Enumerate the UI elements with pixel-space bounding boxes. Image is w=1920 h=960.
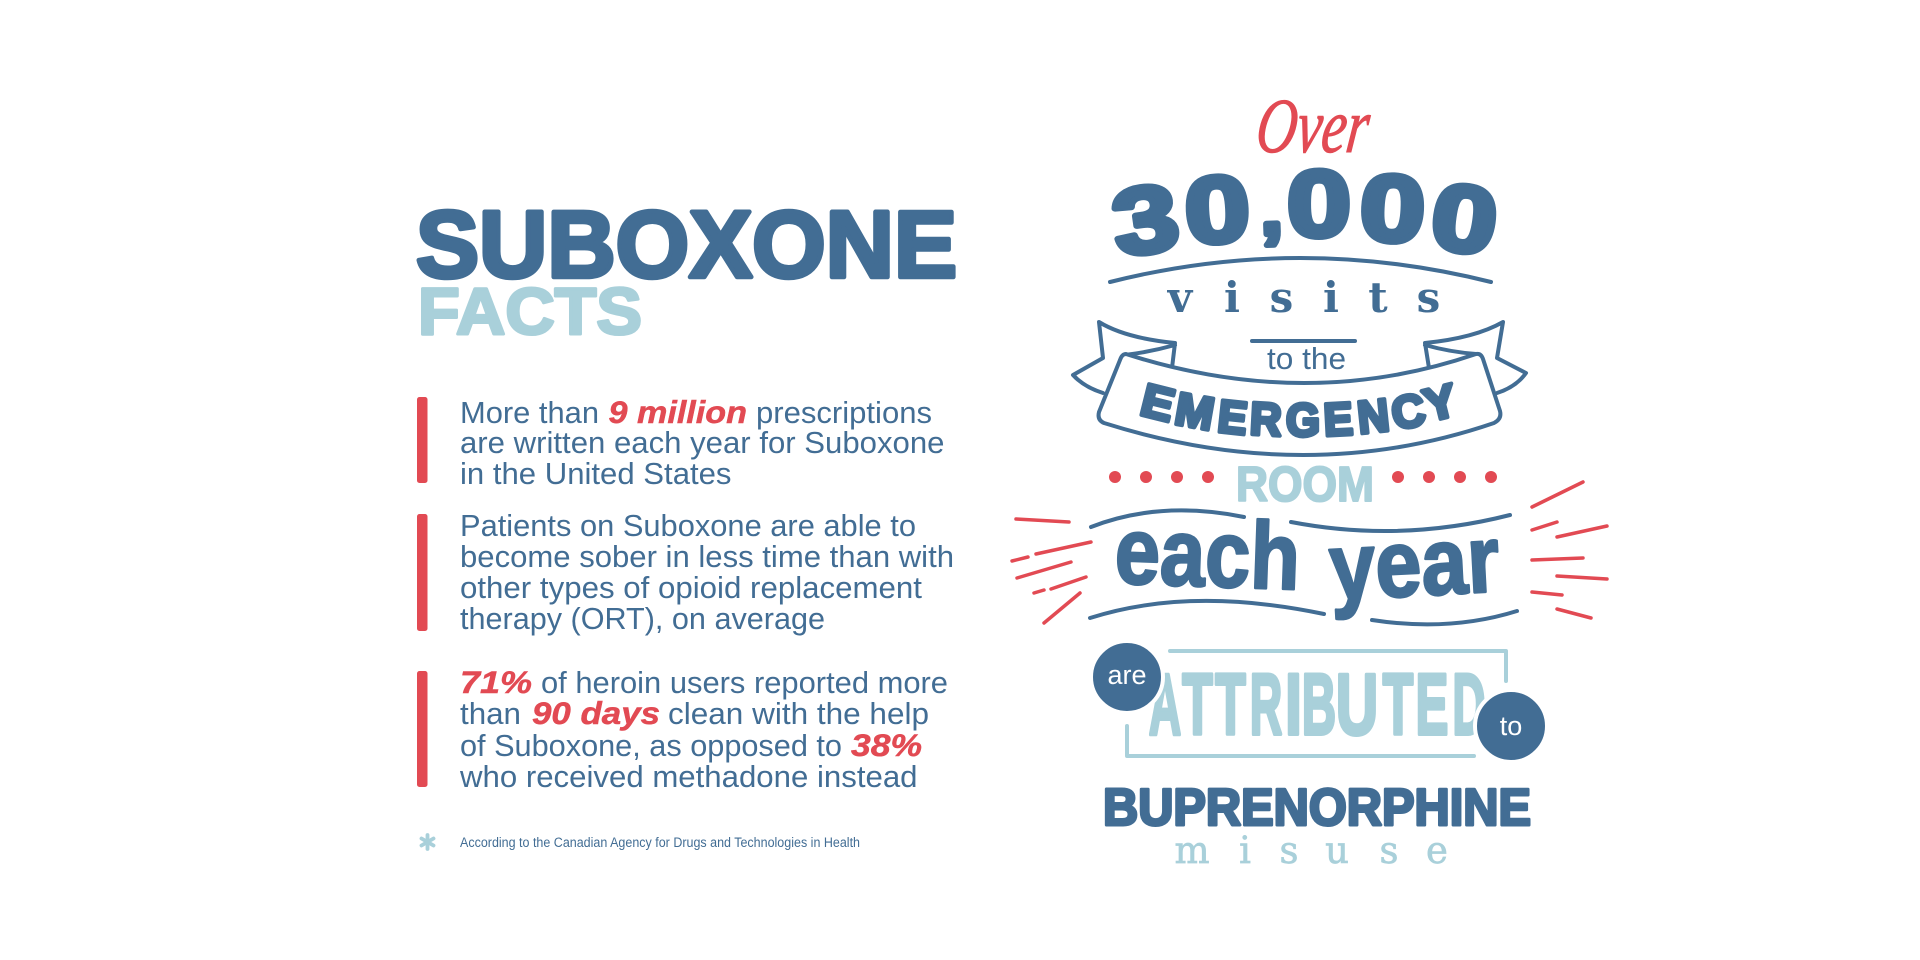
- fact 3 text: 90 days: [532, 695, 660, 731]
- ribbon left tail: [1073, 322, 1175, 393]
- text: ATTRIBUTED: E: [1416, 657, 1448, 752]
- fact 3 text: clean with the help: [668, 697, 929, 731]
- fact 3 text: [459, 664, 948, 794]
- big number: 30,000: 0: [1425, 163, 1504, 276]
- fact 2 text: other types of opioid replacement: [460, 571, 923, 605]
- fact 1 text: More than: [460, 396, 599, 430]
- red rays left: [1012, 519, 1091, 623]
- fact 2 bar: [417, 514, 428, 631]
- ribbon banner: [1073, 322, 1526, 455]
- subtitle: FACTS: FACTS: [418, 274, 642, 348]
- text: ATTRIBUTED: U: [1336, 656, 1378, 753]
- circle badge: to: to: [1500, 711, 1522, 741]
- red dots left: [1109, 471, 1214, 483]
- fact 2 text: Patients on Suboxone are able to: [460, 509, 916, 543]
- fact 1 text: [460, 394, 944, 491]
- big number: 30,000: ,: [1259, 170, 1283, 250]
- heading: Over: Over: [1252, 82, 1375, 169]
- fact 3 text: 38%: [851, 727, 922, 763]
- fact 2 text: therapy (ORT), on average: [460, 602, 825, 636]
- text: ROOM: ROOM: [1236, 458, 1374, 512]
- red rays right: [1532, 482, 1607, 618]
- text: EMERGENCY: C: [1387, 383, 1429, 440]
- panel: emergency room typographic lockup: [1012, 82, 1607, 872]
- text: EMERGENCY: G: [1286, 394, 1320, 446]
- text: EMERGENCY: E: [1136, 373, 1180, 431]
- big number: 30,000: 3: [1106, 164, 1185, 277]
- text: to the: to the: [1267, 341, 1346, 376]
- text: ATTRIBUTED: T: [1383, 656, 1413, 752]
- text: visits: visits: [1167, 273, 1440, 322]
- fact 2 text: [460, 509, 954, 636]
- text: EMERGENCY: E: [1215, 390, 1250, 445]
- footnote text: According to the Canadian Agency for Drugs and Technologies in Health: [460, 835, 860, 850]
- text: ATTRIBUTED: B: [1302, 656, 1336, 753]
- text: EMERGENCY: E: [1322, 392, 1354, 446]
- text: ATTRIBUTED: T: [1182, 656, 1213, 752]
- fact 3 text: of heroin users reported more: [541, 666, 948, 700]
- text: misuse: misuse: [1174, 829, 1448, 872]
- fact 1: [417, 394, 944, 491]
- title: SUBOXONE: SUBOXONE: [416, 192, 957, 298]
- big number: 30,000: [1106, 152, 1504, 277]
- fact 3 bar: [417, 671, 428, 787]
- text: ATTRIBUTED: R: [1250, 656, 1282, 753]
- fact 3 text: 71%: [460, 664, 532, 700]
- text: EMERGENCY: N: [1355, 389, 1392, 444]
- big number: 30,000: 0: [1358, 155, 1428, 263]
- fact 1 text: 9 million: [608, 394, 747, 430]
- red dots right: [1392, 471, 1497, 483]
- footnote: [422, 835, 860, 850]
- fact 1 text: in the United States: [460, 457, 732, 491]
- icon: asterisk: [422, 835, 434, 849]
- ribbon band: [1099, 354, 1500, 455]
- fact 1 text: prescriptions: [756, 396, 932, 430]
- fact 3: [417, 664, 948, 794]
- text: ATTRIBUTED: [1149, 656, 1485, 753]
- circle badge: are: are: [1107, 660, 1147, 690]
- text: EMERGENCY: [1136, 373, 1462, 446]
- text: year: year: [1327, 506, 1502, 621]
- fact 3 text: than: [460, 697, 521, 731]
- circle badge: to: [1475, 690, 1547, 762]
- text: ATTRIBUTED: A: [1149, 656, 1181, 753]
- fact 3 text: who received methadone instead: [459, 760, 918, 794]
- wavy lines around each year: [1090, 510, 1517, 624]
- frame around attributed: [1127, 651, 1506, 756]
- text: ATTRIBUTED: T: [1215, 656, 1246, 752]
- fact 2: [417, 509, 954, 636]
- ribbon right tail: [1425, 322, 1526, 393]
- fact 3 text: of Suboxone, as opposed to: [460, 729, 842, 763]
- text: BUPRENORPHINE: BUPRENORPHINE: [1103, 779, 1531, 837]
- text: EMERGENCY: R: [1249, 392, 1283, 446]
- text: EMERGENCY: M: [1171, 382, 1218, 440]
- text: each: each: [1113, 498, 1302, 610]
- fact 1 bar: [417, 397, 428, 483]
- panel: suboxone facts: [416, 192, 957, 850]
- fact 1 text: are written each year for Suboxone: [460, 426, 944, 460]
- divider above to the: [1252, 339, 1355, 343]
- circle badge: are: [1091, 641, 1163, 713]
- big number: 30,000: 0: [1182, 156, 1252, 264]
- fact 2 text: become sober in less time than with: [460, 540, 954, 574]
- big number: 30,000: 0: [1287, 152, 1351, 257]
- text: EMERGENCY: Y: [1418, 373, 1462, 431]
- text: ATTRIBUTED: I: [1285, 656, 1302, 753]
- text: ATTRIBUTED: D: [1453, 657, 1485, 753]
- curved divider: [1110, 258, 1491, 282]
